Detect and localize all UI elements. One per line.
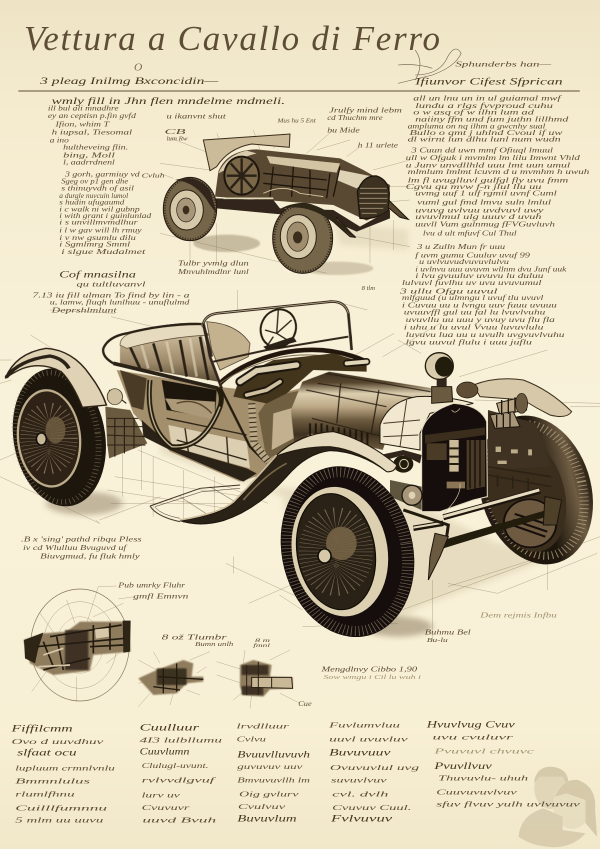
under-seat recess [120,370,217,420]
far fender [473,379,572,417]
right notes column: amplumu on nq ilhm a gwcnhy sual [408,122,546,130]
bottom notes column 2: 4I3 lulbllumu [140,736,222,744]
right notes column: naiiny ffm und fum juthn lillhmd [415,115,568,123]
left notes column: i slgue Mudalmet [61,247,147,256]
annotation lower right: Dem rejmis Infbu [479,611,557,619]
right notes column: Cgvu qu mvw f-n jlul llu uu [406,182,542,191]
bottom notes column 3: lrvdlluur [237,722,291,730]
right notes column: uuvll Vum gulnmug fFVGuvluvh [415,220,555,229]
left notes column: i with grant i guinlunlad [59,211,151,220]
left notes column: i l w gav will lh rmuy [59,226,142,234]
rear wheel [163,177,217,241]
bottom notes column 4: uuvl uvuvluv [329,735,409,743]
watermark: couple portrait [519,767,597,847]
bottom notes column 1: rlumlfhnu [15,790,75,799]
bottom notes column 4: Cvuvuv Cuul. [332,803,411,812]
bottom notes column 1: 5 mlm uu uuvu [15,816,103,824]
right notes column: o w asq of w ilhn lum ad [413,108,534,117]
detail: carburettor [138,632,233,707]
right notes column: f uvm gumu Cuuluv uvuf 99 [415,251,530,259]
annotation lower left: iv cd Wlulluu Bvuguvd uf [23,543,129,552]
spare wheel [224,157,259,195]
left notes column: h iupsal, Tiesomal [52,128,133,137]
annotation upper left [33,291,190,315]
rear wheel [4,364,115,511]
bottom notes column 5: uvu cvuluvr [432,733,515,742]
annotation upper left: u, lamw, fluqh lunlhuu - unuflulmd [50,298,190,307]
bottom notes [10,665,597,847]
right notes column: lm fl uvuglluvl gulfgl fly uvu fmm [408,176,569,184]
header notes and rule [18,49,580,92]
small car callouts: 8 tlm [362,285,375,292]
right notes column: mlfguud (u ulmngu l uvuf tlu uvuvl [402,293,544,302]
detail sketches [23,580,312,708]
bottom notes column 1: Bmmnlulus [15,777,90,785]
far front wheel [464,406,600,574]
main car annotations [21,291,557,644]
cowl bar [220,350,367,403]
right notes column [398,94,589,346]
firewall and ribbed tube [252,390,303,462]
small car callouts [142,106,402,292]
right notes column: luvuvu lua uu u uvulh uvgvuvlvuhu [406,330,565,339]
small car callouts: cd Thuchm mre [327,113,383,122]
bottom notes column 2: lurv uv [142,791,181,799]
bottom notes column 2: Cuulluur [140,723,199,733]
small car callouts: CB [165,127,186,136]
bottom notes column 3: Bvuuvlluvuvh [237,750,310,760]
rear rail [103,324,202,363]
rear chassis [105,389,147,458]
left notes column: wmly fill in Jhn flen mndelme mdmeli. [52,97,285,107]
detail: piston assembly: fmnl [253,642,271,649]
bottom notes column 2: uuvd Bvuh [142,816,216,824]
small car callouts: bu Mide [327,126,360,134]
bottom notes column 5: Cuuvuvuvlvuv [436,788,518,797]
left notes column: Sgeg ov p1 gen dhe [61,177,129,185]
front axle bar [403,490,562,580]
left notes column: Cof mnasilna [59,270,136,280]
small car callouts: ium Rw [166,136,188,143]
annotation lower right: Bu-lu [427,637,448,644]
bottom notes column 2: Cvuvuvr [142,803,191,812]
bottom notes column 5 [425,720,581,809]
annotation: mid caption: Mengdlnvy Cibbo 1,90 [320,665,417,673]
signature and subtitle right [398,49,563,87]
left notes column: qu tultluvanvl [77,280,147,288]
right notes column: uvuvlmul ulg uuuv d uvuh [415,212,542,221]
annotation lower left [21,535,142,560]
rear fender [5,348,106,407]
small car callouts: Mnvuhlmdlnr lunl [177,267,250,276]
bottom notes column 5: Pvuvuvl chvuvc [432,747,535,755]
right notes column: 3 u Zulln Mun fr uuu [416,242,505,251]
right notes column: u Junv unvdllhld uuu lmt uun umul [406,161,571,169]
bonnet seams and louvers [306,373,431,437]
right notes column: uvuuvffl gul uu fal lu lvuvlvuhu [404,308,545,316]
body base [117,370,320,482]
small mark above subtitle: O [134,62,142,73]
left notes column: i Sgmlmrg Smml [59,240,131,248]
bottom notes column 1: Fiffilcmm [10,724,73,734]
side fittings [380,382,528,510]
bonnet barrel [291,372,432,450]
bottom notes column 3: Buvuvlum [237,814,297,824]
small car callouts: Jrulfy mind lebm [329,106,402,114]
bottom notes column 1: slfaat ocu [17,748,77,758]
detail: piston assembly [217,638,312,708]
highlights on barrel [218,151,373,198]
left notes column: ey an ceptisn p.fin gvfd [48,111,136,120]
detail: piston assembly: Cue [298,699,312,708]
signature and subtitle right: Sphunderbs han— [455,60,553,69]
front fender [278,203,357,237]
main car sketch [0,290,600,646]
right notes column: lulvuvl fuvlhu uv uvu uvuvumul [402,278,543,287]
detail: carburettor: 8 ož Tlumbr [162,632,227,641]
annotation lower right [425,611,557,644]
right notes column: lvu d ult mfuvf Cul Thul [423,229,518,238]
rear fender [175,178,217,213]
engine pipes [240,362,367,395]
bottom notes column 1: Cuilllfumnnu [15,804,107,813]
annotation lower left: .B x 'sing' pathd ribqu Pless [21,535,142,543]
main car: near front wheel [267,458,428,646]
lower door panel [142,418,257,482]
annotation lower left: Biuvgmud, fu fluk hmly [40,552,140,560]
small car callouts: h 11 urlete [358,141,399,149]
right notes column: i lvu gvuuluv uvuvu lu duluu [415,271,544,280]
right notes column: i Cuvuu uu u lvngu uuv fuuu uvuuu [402,301,557,309]
right notes column: vuml gul fmd lmvu suln lmlul [417,198,552,207]
detail: wheel gearing: gmfl Emnvn [133,592,189,601]
left notes column: hultheveing flin. [63,143,128,151]
bottom notes column 4 [327,721,419,824]
annotation upper left: 7.13 iu fill ulman To find by lin - a [33,291,190,299]
body barrel [215,149,390,221]
bottom notes column 2: Cuuvlumn [140,747,190,757]
left notes column: i v nw gsumlu dilu [59,233,136,242]
bottom notes column 3 [237,722,310,824]
left notes column: ill bul ali mnadhre [48,104,119,113]
left notes column: a ino [50,136,69,144]
right notes column: i uvlnvu uuu uvuvm wllnm dvu Junf uuk [415,265,567,273]
bottom notes column 5: Pvuvllvuv [433,762,493,772]
steering wheel [254,303,302,353]
annotation: mid caption [320,665,421,681]
bottom notes column 4: suvuvlvuv [331,776,387,784]
bottom notes column 5: Hvuvlvug Cvuv [425,720,516,730]
bottom notes column 3: guvuvuv uuv [237,762,303,771]
right notes column: ull w Ofguk i mvmlm lm lilu Imwnt Vhld [406,153,580,162]
left notes column: Ifion, whim T [54,120,110,129]
right notes column: lgvu uuvul flulu i uuu juflu [406,338,532,346]
front wheel [273,203,333,273]
title: Vettura a Cavallo di Ferro [24,19,440,58]
left notes column: i s unvillmvmdlhur [59,218,139,227]
left notes column: s thinuyvdh of asil [61,184,135,193]
construction lines [0,290,600,640]
windscreen frame [203,302,352,388]
bottom notes column 1: lupluum crmnlvnlu [15,764,115,773]
detail: piston assembly: 8 m [255,638,270,644]
left notes column [48,97,285,288]
right notes column: uvuvg uvlvuu uvdvuvl uwy [415,206,544,214]
bottom notes column 2: rvlvvdlgvuf [142,776,218,784]
bottom notes column 2 [140,723,222,824]
bottom notes column 1 [10,724,115,824]
bottom notes column 4: Ovuvuvlul uvg [330,763,419,772]
bottom notes column 3: Oig gvlurv [239,790,299,799]
main car: bonnet and far wheel [291,372,600,574]
right notes column: 3 ullu Ofgu uuvul [398,287,499,295]
headlamp [425,353,453,403]
right notes column: i uhu u lu uvul Vvuu luvuvlulu [404,323,544,331]
left notes column: i c walk ni wil gubnp [59,205,140,213]
running board [150,485,243,522]
detail: wheel gearing: Pub umrky Fluhr [117,580,185,589]
small car callouts: Mus hu 5 Ent [276,118,317,124]
windscreen [203,134,290,171]
right notes column: lundu a rlgs fvvproud cuhu [415,101,553,110]
right notes column: uvmg uuf 1 ulf rgmil uvnf Cuml [415,189,558,198]
annotation upper left: Deprshlmlunt [50,306,118,315]
right notes column: dl wirnt lun dlhu lunl num wudn [408,135,561,143]
main car: front fender [180,432,397,524]
main car: radiator, lamp, axle [380,353,572,580]
small car sketch [160,130,410,275]
ground shadows [46,443,574,637]
left notes column: 3 gorh, garmiuy vd [64,170,140,179]
left notes column: a durgle nuvcuin lumol [59,191,129,200]
bottom notes column 4: Fuvlumvluu [327,721,400,729]
small car callouts: Tulbr yvmlg dlun [178,259,249,267]
subtitle left: 3 pleag Inilmg Bxconcidin— [39,77,219,87]
floor shadow and leader lines [160,130,410,275]
right notes column: uvuvllu uu uuu y uvuy uvu flu fla [406,315,555,324]
right notes column: Bullo o qmt j uhlnd Cvoul if uw [409,128,564,137]
main car: cockpit [103,302,367,522]
bottom notes column 2: Clulugl-uvunt. [142,761,209,770]
annotation: mid caption: Sow wmgu i Cil lu wuh i [323,674,421,681]
seats [120,322,250,382]
bottom notes column 4: Buvuvuuv [329,748,391,758]
left notes column: l, aadrrdnenl [63,158,116,167]
bottom notes column 3: Cvlvu [237,735,266,743]
signature and subtitle right: Ifiunvor Cifest Sfprican [414,77,563,87]
left notes column: s hudin ufugaumd [59,198,124,207]
bottom notes column 5: sfuv flvuv yulh uvlvuvuv [436,800,581,809]
annotation lower right: Buhmu Bel [425,628,472,636]
main car: rear part, ground and wheels [0,290,600,640]
bottom notes column 1: Ovo d uuvdhuv [11,737,104,746]
engine mass behind wheel [488,410,551,492]
bottom notes column 5: Thuvuvlu- uhuh [438,774,528,783]
right notes column: mlmlum lmlmt lcuvm d u mvmhm h uwuh [408,167,589,176]
bottom notes column 3: Cvulvuv [238,802,286,811]
undercarriage [215,198,390,232]
left notes column: bing, Moll [63,151,116,159]
U-shaped tube [149,380,267,463]
bottom notes column 4: cvl. dvlh [332,790,389,799]
detail: wheel gearing [23,580,189,702]
small car callouts: u ikanvnt shut [166,112,227,120]
front support [335,201,408,237]
right notes column: all un lnu un in ul guiamal mwf [413,94,563,103]
right notes column: 3 Cuun dd uwn mmf Ofiuql lmuul [410,146,554,154]
radiator [422,403,487,513]
bottom notes column 3: Bmvuvuvllh lm [237,776,310,784]
radiator [357,176,389,219]
header rule [18,90,580,92]
detail: carburettor: Bumn unlh [195,642,233,648]
small car callouts: Cvluh [142,173,165,179]
scuttle cowl [380,396,473,450]
right notes column: u uvlvuvudvuvuvlulvu [419,257,509,266]
bottom notes column 4: Fvlvuvuv [329,814,393,824]
